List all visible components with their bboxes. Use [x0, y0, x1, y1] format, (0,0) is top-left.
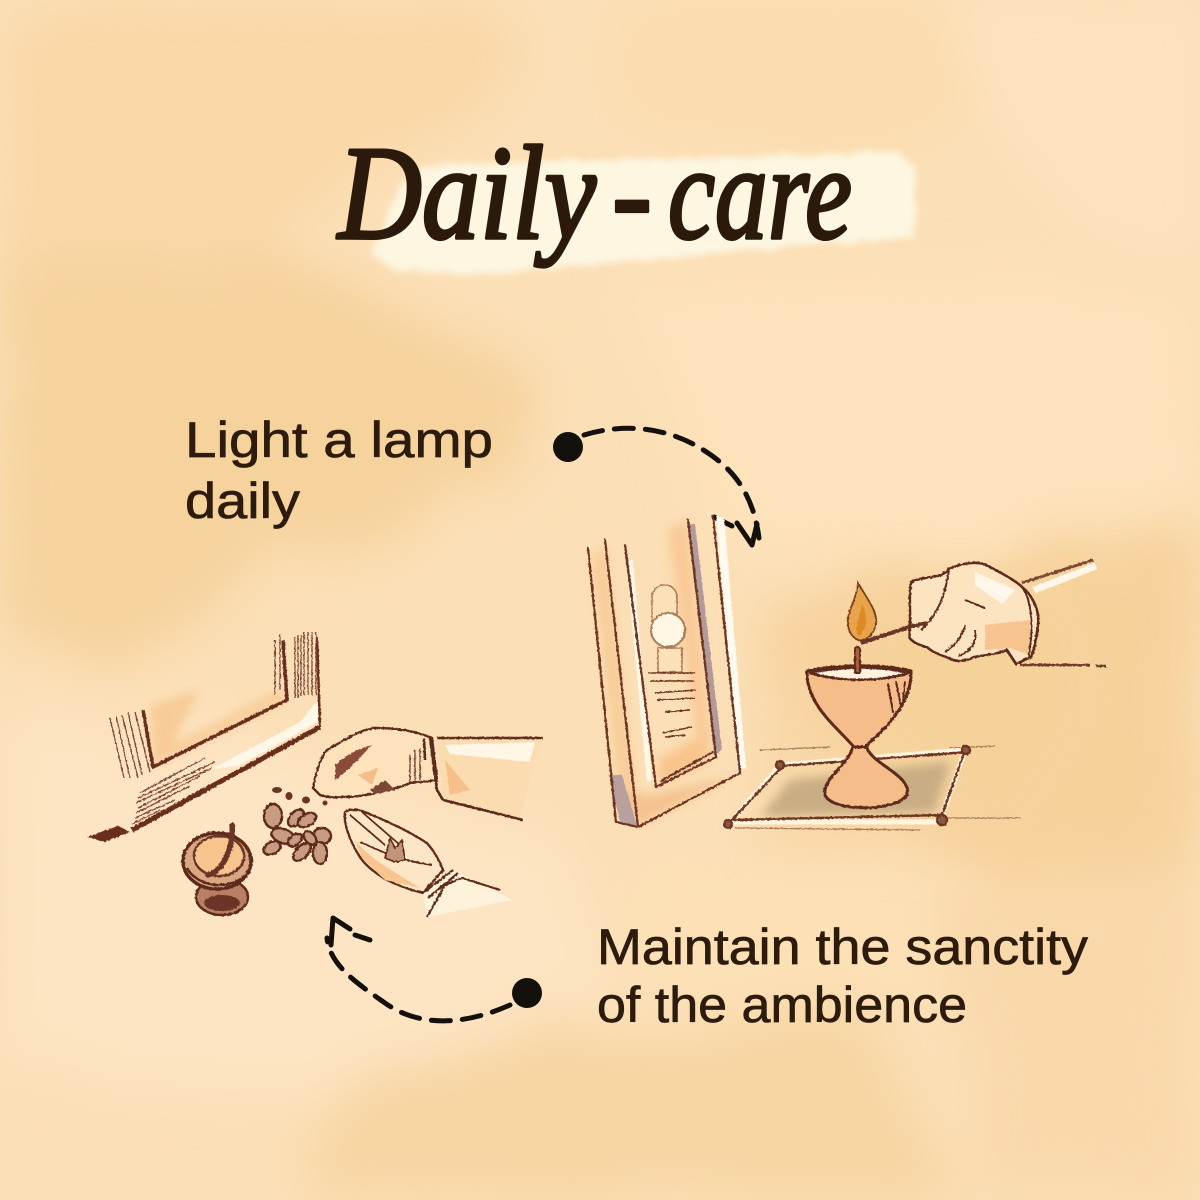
rangoli mat: [724, 746, 1020, 830]
title: Daily: [336, 119, 596, 267]
wash behind lamp: [760, 570, 1130, 860]
label: maintain the sanctity: of the ambience: [597, 977, 967, 1033]
label: light a lamp daily: daily: [185, 473, 300, 529]
arrow: lamp label to lamp illustration: [553, 428, 759, 545]
title: care: [668, 119, 852, 267]
hand with match: [861, 560, 1106, 666]
open palm holding flowers: [345, 810, 513, 917]
deity in shrine: [648, 585, 696, 737]
falling petals: [272, 787, 328, 806]
threshold and door frame: [87, 632, 320, 842]
illustration: lighting the lamp: [588, 516, 1130, 860]
title highlight: brush stroke: [372, 150, 916, 275]
label: maintain the sanctity: Maintain the sanctity: [597, 919, 1088, 975]
flower pile: [261, 804, 331, 864]
arrow: ambience label to offering illustration: [327, 918, 542, 1021]
title: -: [612, 119, 652, 267]
label: light a lamp daily: Light a lamp: [185, 412, 493, 468]
illustration: offering flowers: [87, 632, 543, 917]
small offering bowl: [183, 825, 251, 915]
title: [336, 119, 852, 267]
hand dropping petals: [313, 728, 543, 820]
flame: [848, 583, 876, 640]
doorway shrine: [588, 516, 746, 827]
oil lamp: [807, 647, 911, 808]
